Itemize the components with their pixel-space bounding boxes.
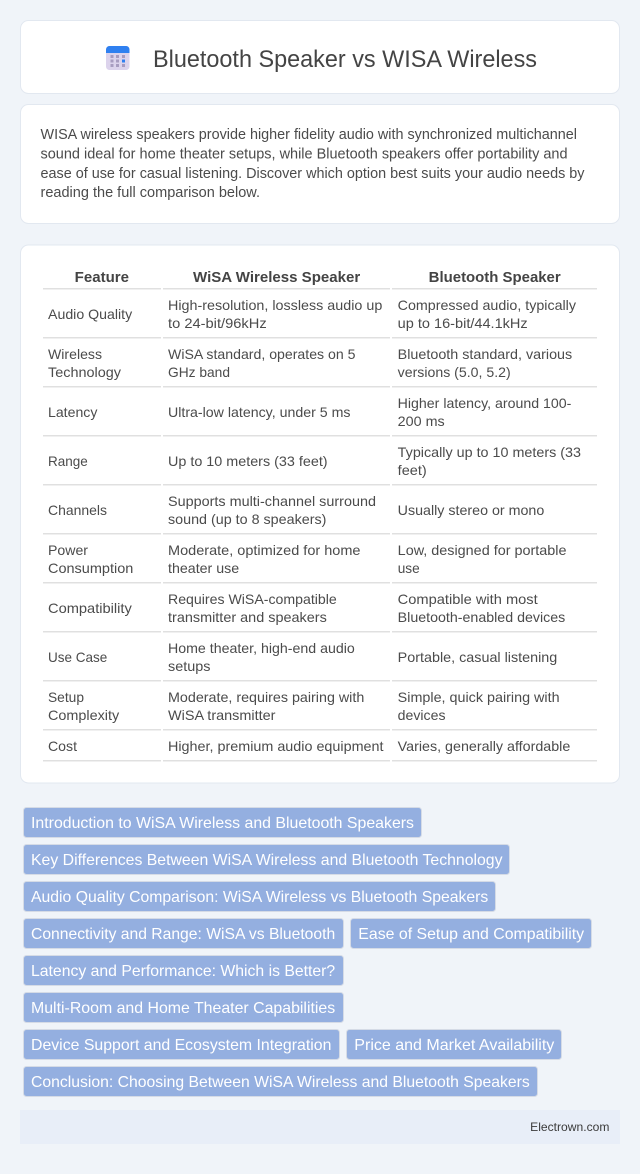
link: introduction: Introduction to WiSA Wireless and Bluetooth Speakers <box>31 815 414 832</box>
link: device support: Device Support and Ecosystem Integration <box>31 1037 331 1054</box>
row: channels: Channels <box>48 502 107 518</box>
row: channels: Supports multi-channel surround <box>168 493 376 509</box>
link: connectivity and range <box>24 918 344 948</box>
row: use case: Use Case <box>48 649 108 665</box>
row: power consumption: Consumption <box>48 560 133 576</box>
link: connectivity and range: Connectivity and Range: WiSA vs Bluetooth <box>31 926 335 943</box>
row: compatibility: Requires WiSA-compatible <box>168 591 337 607</box>
row: wireless technology: Technology <box>48 364 121 380</box>
table header row <box>75 270 561 286</box>
intro text: ease of use for casual listening. Discover which option best suits your audio needs by <box>40 166 585 182</box>
table header row: Feature <box>75 270 129 286</box>
row: cost: Varies, generally affordable <box>398 738 571 754</box>
row: setup complexity: WiSA transmitter <box>168 707 276 723</box>
link: price <box>346 1030 562 1060</box>
row: use case: setups <box>168 658 210 674</box>
row: audio quality: up to 16-bit/44.1kHz <box>398 315 528 331</box>
row: power consumption: theater use <box>168 560 239 576</box>
title: Bluetooth Speaker vs WISA Wireless <box>153 46 537 73</box>
row: wireless technology: Wireless <box>48 346 102 362</box>
footer: Electrown.com <box>530 1120 609 1134</box>
row: wireless technology: GHz band <box>168 364 230 380</box>
row: latency <box>48 395 572 429</box>
footer <box>20 1110 620 1144</box>
row: use case: Portable, casual listening <box>398 649 557 665</box>
panel: title header <box>20 20 620 94</box>
icon: calendar grid <box>106 46 130 70</box>
row: power consumption: Moderate, optimized for home <box>168 542 361 558</box>
link: audio quality comparison <box>24 882 496 912</box>
row: channels: sound (up to 8 speakers) <box>168 511 326 527</box>
row: use case <box>48 640 557 674</box>
row: audio quality: to 24-bit/96kHz <box>168 315 267 331</box>
intro text: sound ideal for home theater setups, while Bluetooth speakers offer portability and <box>40 146 568 162</box>
link: conclusion: Conclusion: Choosing Between WiSA Wireless and Bluetooth Speakers <box>31 1074 530 1091</box>
row: setup complexity: Setup <box>48 689 84 705</box>
row: setup complexity: Moderate, requires pairing with <box>168 689 364 705</box>
row: range: Range <box>48 453 88 469</box>
row: cost: Higher, premium audio equipment <box>168 738 384 754</box>
row: cost <box>48 738 571 754</box>
row: power consumption: Power <box>48 542 88 558</box>
row: latency: 200 ms <box>398 413 445 429</box>
row: compatibility: Compatible with most <box>398 591 538 607</box>
row: power consumption <box>48 542 567 576</box>
row: channels: Usually stereo or mono <box>398 502 545 518</box>
row: audio quality: Compressed audio, typically <box>398 297 576 313</box>
row: use case: Home theater, high-end audio <box>168 640 355 656</box>
link: key differences: Key Differences Between WiSA Wireless and Bluetooth Technology <box>31 852 502 869</box>
row: compatibility: Bluetooth-enabled devices <box>398 609 565 625</box>
link: ease of setup <box>350 918 592 948</box>
table header row: Bluetooth Speaker <box>429 270 561 286</box>
row: setup complexity: Complexity <box>48 707 119 723</box>
panel: introduction <box>20 104 620 224</box>
link: conclusion <box>24 1066 538 1096</box>
link: key differences <box>24 844 510 874</box>
row: latency: Latency <box>48 404 97 420</box>
table header row: WiSA Wireless Speaker <box>193 270 361 286</box>
row: setup complexity: Simple, quick pairing with <box>398 689 560 705</box>
row: latency: Ultra-low latency, under 5 ms <box>168 404 350 420</box>
intro text: WISA wireless speakers provide higher fidelity audio with synchronized multichannel <box>40 127 577 143</box>
row: channels <box>48 493 545 527</box>
link: audio quality comparison: Audio Quality Comparison: WiSA Wireless vs Bluetooth Speakers <box>31 889 488 906</box>
row: wireless technology: versions (5.0, 5.2) <box>398 364 511 380</box>
row: compatibility: Compatibility <box>48 600 132 616</box>
link: device support <box>24 1030 340 1060</box>
row: setup complexity <box>48 689 560 723</box>
row: setup complexity: devices <box>398 707 446 723</box>
row: latency: Higher latency, around 100- <box>398 395 572 411</box>
link: price: Price and Market Availability <box>354 1037 554 1054</box>
link: introduction <box>24 808 422 838</box>
panel: topic links <box>24 808 592 1096</box>
link: multi-room <box>24 992 344 1022</box>
row: range <box>48 444 581 478</box>
row: power consumption: Low, designed for portable <box>398 542 567 558</box>
row: compatibility: transmitter and speakers <box>168 609 327 625</box>
link: latency and performance: Latency and Performance: Which is Better? <box>31 963 335 980</box>
row: range: Typically up to 10 meters (33 <box>398 444 581 460</box>
row: compatibility <box>48 591 565 625</box>
link: ease of setup: Ease of Setup and Compatibility <box>358 926 584 943</box>
row: range: feet) <box>398 462 427 478</box>
row: power consumption: use <box>398 560 420 576</box>
row: audio quality <box>48 297 576 331</box>
row: audio quality: Audio Quality <box>48 306 132 322</box>
row: wireless technology: Bluetooth standard, various <box>398 346 572 362</box>
row: cost: Cost <box>48 738 77 754</box>
intro text: reading the full comparison below. <box>40 185 260 201</box>
panel: comparison table <box>20 245 620 783</box>
intro text <box>40 127 585 201</box>
row: range: Up to 10 meters (33 feet) <box>168 453 328 469</box>
row: wireless technology: WiSA standard, operates on 5 <box>168 346 356 362</box>
row: wireless technology <box>48 346 572 380</box>
row: audio quality: High-resolution, lossless audio up <box>168 297 383 313</box>
link: multi-room: Multi-Room and Home Theater Capabilities <box>31 1000 335 1017</box>
link: latency and performance <box>24 956 344 986</box>
